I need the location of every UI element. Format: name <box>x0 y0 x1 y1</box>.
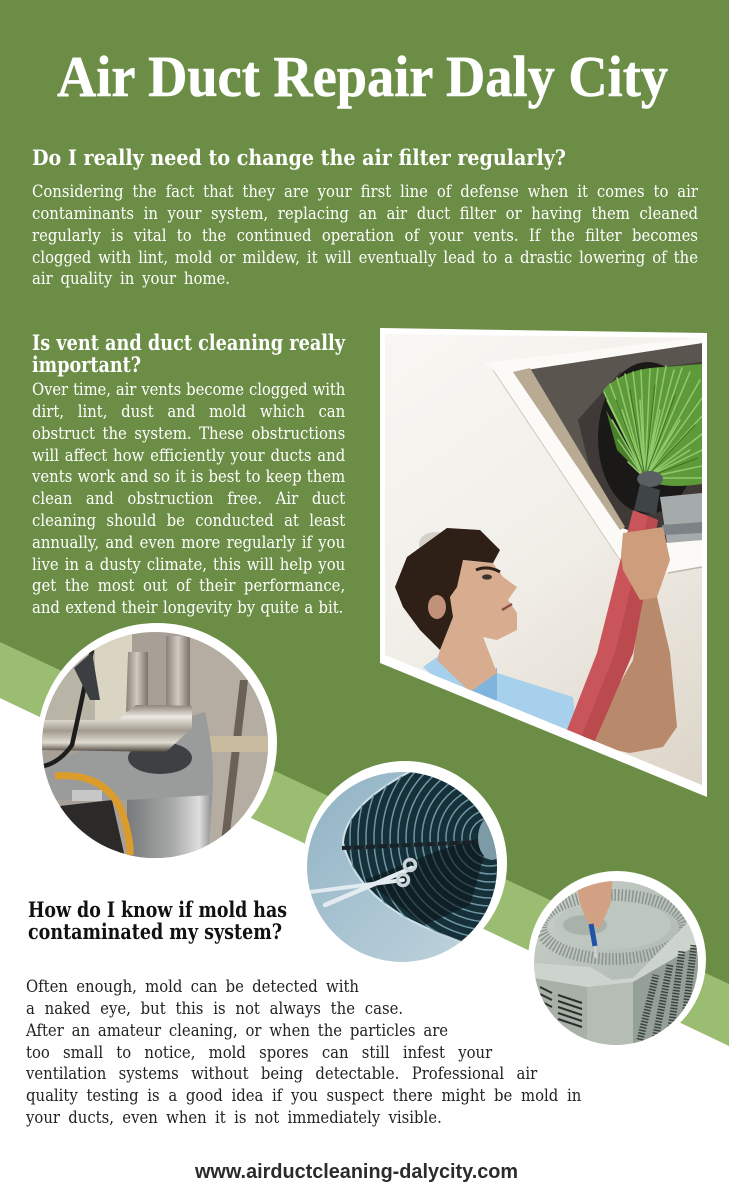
fan fins <box>541 895 685 959</box>
unit edge <box>534 923 702 990</box>
text block: vent cleaning: will affect how efficiently your ducts and <box>32 446 345 465</box>
heading: vent cleaning <box>32 330 346 377</box>
white ring <box>528 871 706 1049</box>
wrenches <box>310 860 416 905</box>
brush connector <box>634 471 663 515</box>
side grille <box>640 945 694 1040</box>
heading: mold: contaminated my system? <box>28 919 282 944</box>
hub <box>478 820 497 860</box>
text block: air filter: air quality in your home. <box>32 269 230 288</box>
text block: mold: your ducts, even when it is not immediately visible. <box>26 1108 442 1127</box>
heading: mold: How do I know if mold has <box>28 897 287 922</box>
heading: mold <box>28 897 287 944</box>
fan opening <box>342 772 497 942</box>
man's eye and brow <box>476 568 512 610</box>
circular photo: condenser fan with wrenches <box>304 761 507 962</box>
red hose <box>565 510 658 745</box>
text block: air filter: Considering the fact that they are your first line of defense when it comes to air <box>32 182 698 201</box>
wall <box>385 334 702 794</box>
dark fan blade <box>365 835 490 925</box>
circular photo: outdoor AC unit service <box>528 871 706 1049</box>
ceiling frame <box>485 337 703 573</box>
heading: vent cleaning: Is vent and duct cleaning really <box>32 330 346 355</box>
text block: vent cleaning: vents work and so it is best to keep them <box>32 467 345 486</box>
text block: mold: After an amateur cleaning, or when the particles are <box>26 1021 448 1040</box>
vent opening <box>513 362 702 542</box>
heading: vent cleaning: important? <box>32 352 141 377</box>
heading: air filter: Do I really need to change the air filter regularly? <box>32 145 566 170</box>
text block: air filter: contaminants in your system, replacing an air duct filter or having them cleaned <box>32 204 698 223</box>
text block: mold: Often enough, mold can be detected with <box>26 977 359 996</box>
text block: vent cleaning: get the most out of their performance, <box>32 576 345 595</box>
photo: technician cleaning ceiling duct <box>380 328 707 797</box>
text block: vent cleaning: annually, and even more regularly if you <box>32 533 345 552</box>
grille strut <box>342 842 480 848</box>
white ring <box>303 761 507 965</box>
white ring <box>37 623 277 863</box>
footer website url: www.airductcleaning-dalycity.com <box>194 1161 518 1183</box>
text block: vent cleaning: obstruct the system. These obstructions <box>32 424 345 443</box>
text block: air filter: clogged with lint, mold or mildew, it will eventually lead to a drastic lowering of the <box>32 248 698 267</box>
text block: vent cleaning: dirt, lint, dust and mold which can <box>32 402 345 421</box>
metal duct <box>660 493 702 543</box>
man's hand <box>621 527 670 600</box>
light green diagonal band <box>0 642 729 1046</box>
fan drum <box>44 712 213 862</box>
man's arm <box>577 597 677 753</box>
text block: air filter <box>32 182 698 288</box>
text block: vent cleaning: cleaning should be conducted at least <box>32 511 345 530</box>
photo frame <box>380 328 707 797</box>
man's neck and face <box>437 560 517 692</box>
man's ear <box>428 595 446 619</box>
shirt <box>423 656 576 734</box>
text block: vent cleaning: clean and obstruction free. Air duct <box>32 489 345 508</box>
text block: vent cleaning: live in a dusty climate, this will help you <box>32 555 345 574</box>
text block: mold: ventilation systems without being detectable. Professional air <box>26 1064 537 1083</box>
louvres <box>540 987 582 1027</box>
black frame and cable <box>44 650 126 862</box>
green brush <box>603 364 702 486</box>
circular photo: ductwork <box>37 623 277 863</box>
text block: mold: too small to notice, mold spores can still infest your <box>26 1043 492 1062</box>
man's hair <box>395 528 500 650</box>
round ceiling fixture <box>419 532 440 548</box>
text block: vent cleaning: Over time, air vents become clogged with <box>32 380 345 399</box>
title: Air Duct Repair Daly City <box>57 44 668 109</box>
text block: air filter: regularly is vital to the continued operation of your vents. If the filter becomes <box>32 226 698 245</box>
text block: mold <box>26 977 581 1127</box>
text block: mold: quality testing is a good idea if you suspect there might be mold in <box>26 1086 581 1105</box>
text block: mold: a naked eye, but this is not always the case. <box>26 999 403 1018</box>
fan grille arcs <box>349 772 497 942</box>
blue unit top <box>305 770 500 965</box>
vertical pipes <box>126 652 148 712</box>
white lower section <box>0 698 729 1200</box>
side panels <box>536 978 587 1040</box>
text block: vent cleaning: and extend their longevity by quite a bit. <box>32 598 343 617</box>
text block: vent cleaning <box>32 380 346 617</box>
orange hose <box>55 776 130 855</box>
background wall <box>40 630 272 862</box>
horizontal pipe <box>40 705 192 752</box>
hand with screwdriver <box>577 878 613 958</box>
unit top <box>530 878 702 1048</box>
